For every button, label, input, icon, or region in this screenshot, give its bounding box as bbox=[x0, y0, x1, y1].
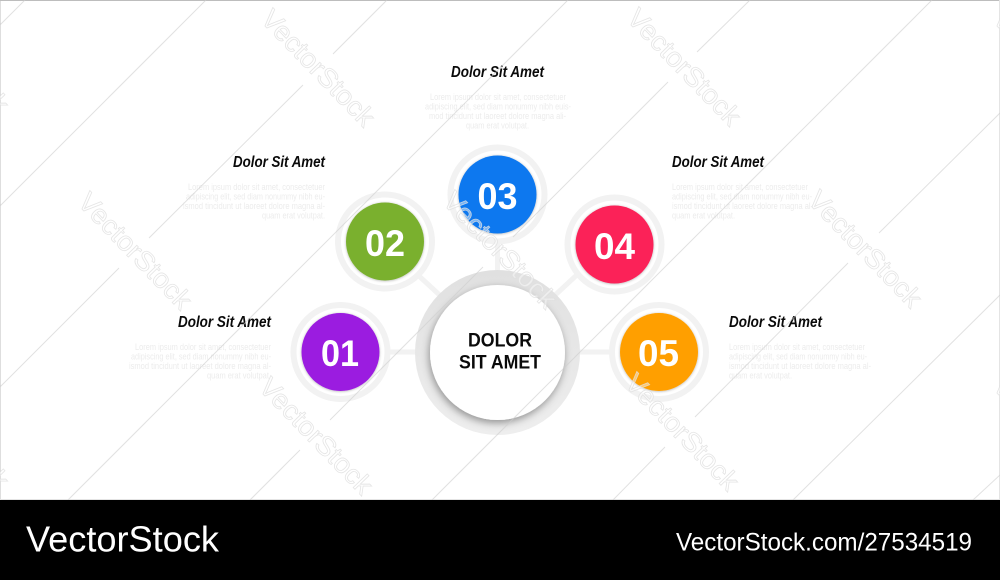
text block 05 bbox=[729, 314, 871, 382]
text block 05: Lorem ipsum dolor sit amet, consectetuer bbox=[729, 342, 865, 353]
text block 05: quam erat volutpat. bbox=[729, 370, 792, 382]
hub label: SIT AMET bbox=[459, 352, 541, 374]
text block 01: Dolor Sit Amet bbox=[178, 314, 272, 331]
text block 04: Lorem ipsum dolor sit amet, consectetuer bbox=[672, 182, 808, 193]
watermark text stamps: VectorStock bbox=[255, 4, 381, 133]
text block 05: ismod tincidunt ut laoreet dolore magna al- bbox=[729, 361, 871, 372]
connectors between centre and numbered circles bbox=[388, 243, 612, 352]
footer image id: VectorStock.com/27534519 bbox=[676, 528, 972, 556]
step 04 circle bbox=[568, 198, 662, 292]
step 02 circle: 02 bbox=[365, 223, 405, 264]
hub outer ring bbox=[415, 270, 580, 435]
text block 01 bbox=[129, 314, 272, 382]
watermark text stamps: VectorStock bbox=[253, 372, 379, 501]
step 04 circle: 04 bbox=[594, 226, 635, 267]
watermark text stamps: VectorStock bbox=[437, 186, 563, 315]
text block 02: Dolor Sit Amet bbox=[233, 154, 326, 171]
text block 04: quam erat volutpat. bbox=[672, 210, 735, 222]
text block 03: adipiscing elit, sed diam nonummy nibh euis- bbox=[425, 102, 571, 112]
text block 04: ismod tincidunt ut laoreet dolore magna al- bbox=[672, 201, 813, 212]
text block 01: adipiscing elit, sed diam nonummy nibh eu- bbox=[131, 352, 271, 362]
step 03 circle bbox=[450, 148, 544, 242]
text block 03: Lorem ipsum dolor sit amet, consectetuer bbox=[430, 92, 566, 103]
text block 03 bbox=[425, 64, 571, 132]
text block 02: adipiscing elit, sed diam nonummy nibh eu- bbox=[186, 192, 325, 202]
text block 01: ismod tincidunt ut laoreet dolore magna al- bbox=[129, 361, 271, 372]
text block 02: Lorem ipsum dolor sit amet, consectetuer bbox=[188, 182, 325, 193]
step 02 circle bbox=[338, 194, 432, 288]
step 03 circle: 03 bbox=[478, 176, 518, 217]
text block 03: mod tincidunt ut laoreet dolore magna ali- bbox=[429, 111, 566, 122]
step 05 circle: 05 bbox=[638, 333, 679, 374]
text block 01: Lorem ipsum dolor sit amet, consectetuer bbox=[135, 342, 271, 353]
central hub bbox=[415, 270, 580, 435]
text block 02: quam erat volutpat. bbox=[262, 210, 325, 222]
step 01 circle: 01 bbox=[321, 333, 359, 374]
footer logo text: VectorStock bbox=[26, 518, 220, 560]
watermark text stamps: VectorStock bbox=[72, 187, 198, 316]
text block 05: Dolor Sit Amet bbox=[729, 314, 823, 331]
text block 03: Dolor Sit Amet bbox=[451, 64, 545, 81]
watermark text stamps: VectorStock bbox=[802, 185, 928, 314]
text block 03: quam erat volutpat. bbox=[466, 120, 529, 132]
hub label: DOLOR bbox=[468, 330, 532, 352]
hub inner disc bbox=[430, 285, 565, 420]
text block 05: adipiscing elit, sed diam nonummy nibh eu- bbox=[729, 352, 867, 362]
text block 02 bbox=[183, 154, 326, 222]
text block 04: adipiscing elit, sed diam nonummy nibh eu- bbox=[672, 192, 812, 202]
text block 02: ismod tincidunt ut laoreet dolore magna al- bbox=[183, 201, 325, 212]
step 01 circle bbox=[294, 305, 388, 399]
step 05 circle bbox=[612, 305, 706, 399]
text block 04: Dolor Sit Amet bbox=[672, 154, 765, 171]
text block 01: quam erat volutpat. bbox=[207, 370, 271, 382]
watermark text stamps: VectorStock bbox=[619, 368, 745, 497]
footer bar bbox=[0, 500, 1000, 580]
watermark text stamps: VectorStock bbox=[621, 3, 747, 132]
text block 04 bbox=[672, 154, 813, 222]
hub label bbox=[459, 330, 541, 374]
